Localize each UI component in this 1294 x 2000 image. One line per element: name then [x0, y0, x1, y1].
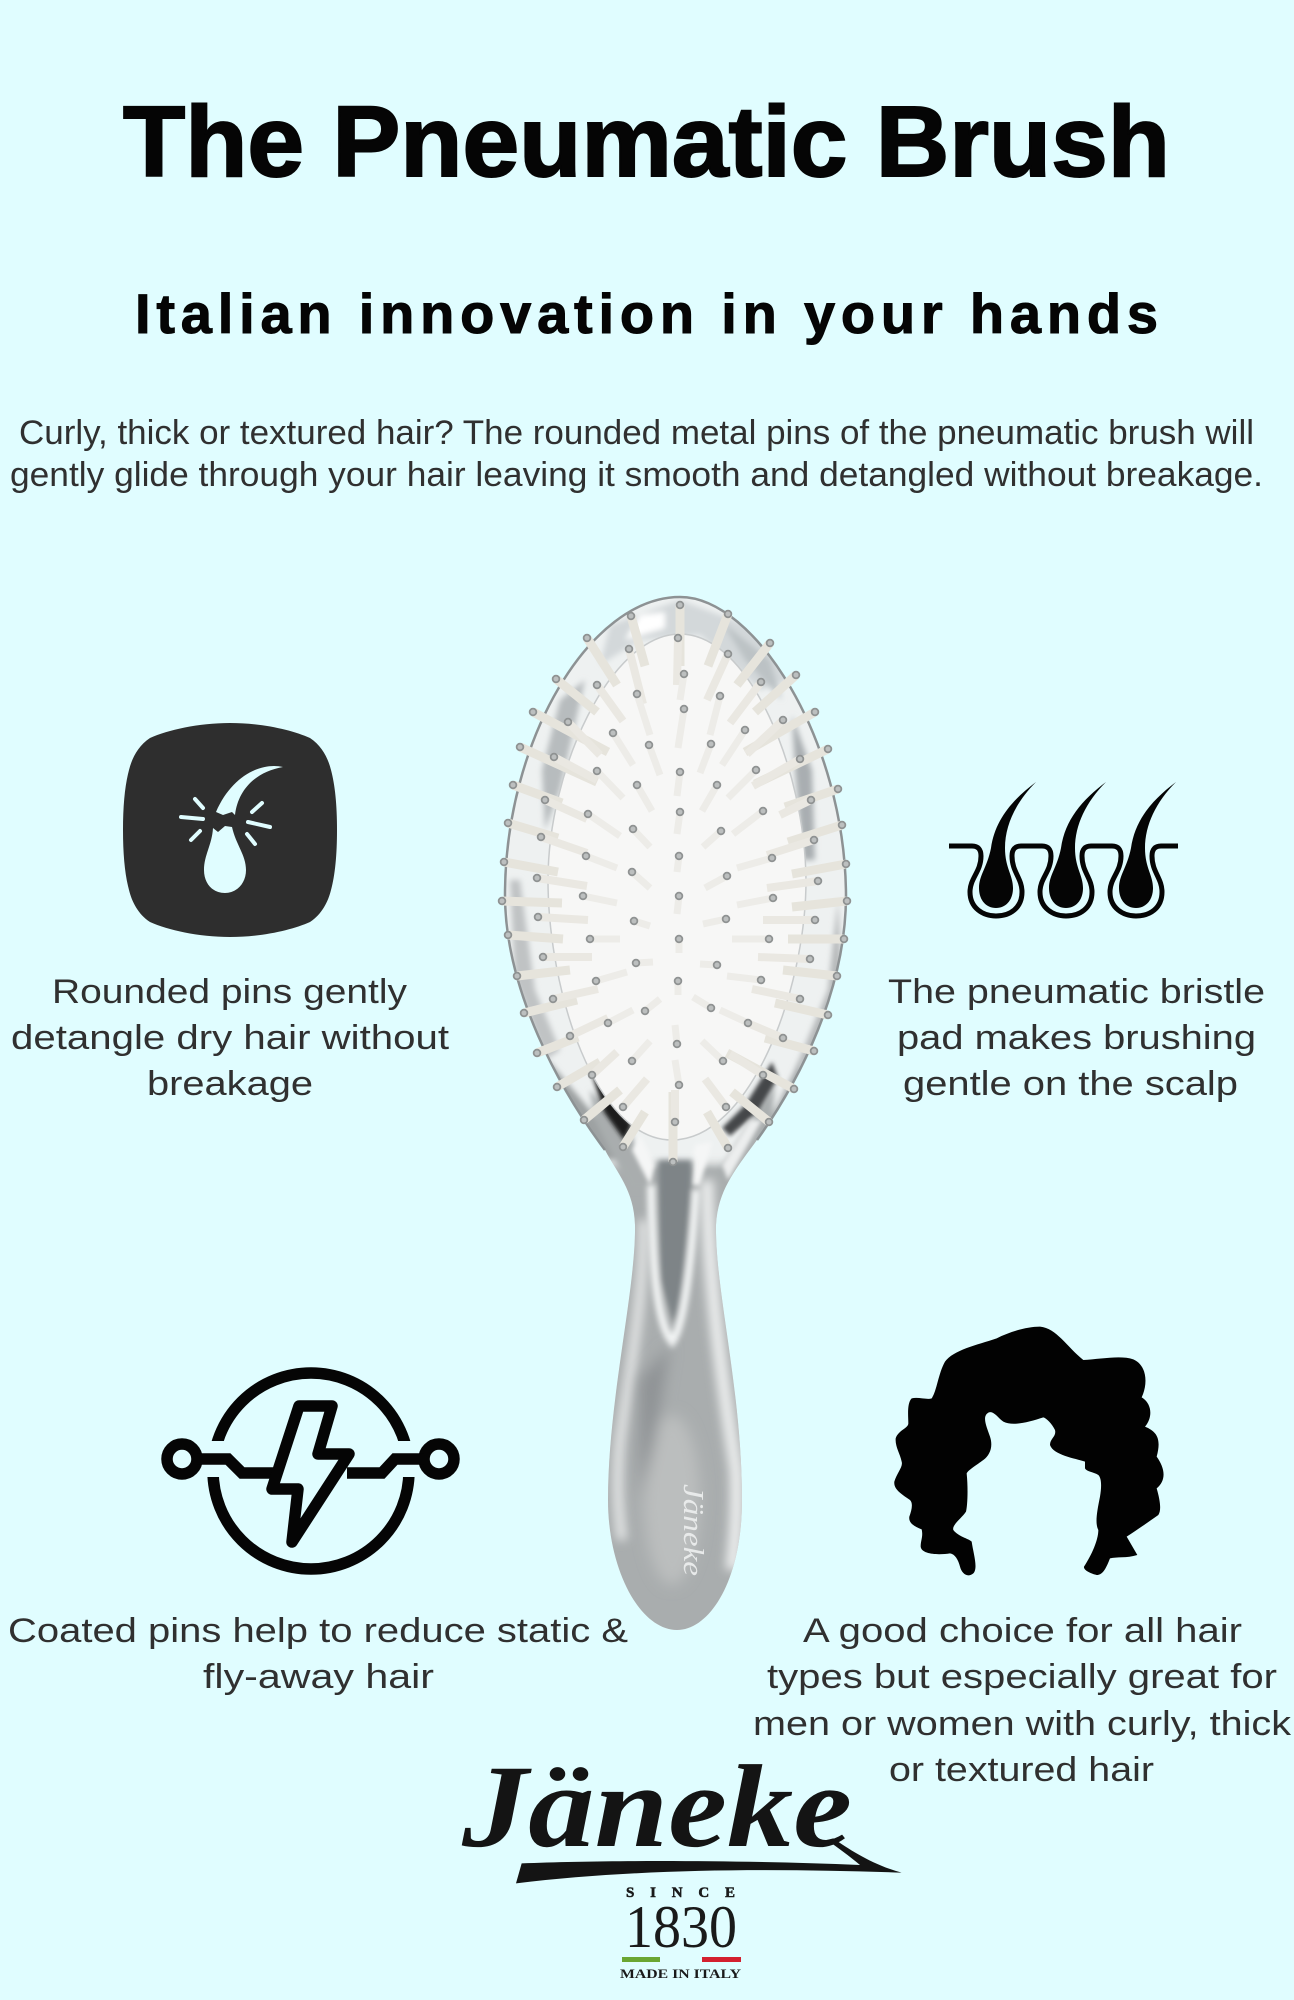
- text: hair types: or textured hair: [889, 1751, 1154, 1789]
- text: rounded pins: breakage: [147, 1065, 313, 1103]
- text: coated pins: fly-away hair: [203, 1658, 434, 1696]
- text: hair types: A good choice for all hair: [803, 1612, 1242, 1650]
- inner pins: [583, 674, 773, 1085]
- brush rim: [505, 597, 846, 1150]
- bristle pad: [548, 634, 806, 1140]
- flag bars: [622, 1957, 660, 1962]
- brush illustration: [490, 590, 860, 1655]
- text: pneumatic pad: pad makes brushing: [897, 1019, 1256, 1057]
- text: coated pins: Coated pins help to reduce static &: [8, 1612, 628, 1650]
- text: rounded pins: [11, 973, 450, 1103]
- logo swoosh: [516, 1838, 902, 1883]
- text: hair types: men or women with curly, thick: [753, 1705, 1292, 1743]
- icon: broken hair: [123, 723, 337, 937]
- icon: hair follicles: [949, 782, 1178, 916]
- logo wordmark: Jäneke: [461, 1741, 852, 1872]
- year: 1830: [625, 1894, 737, 1960]
- since: SINCE: [626, 1885, 735, 1901]
- long outer pins: [502, 605, 847, 1162]
- subtitle: Italian innovation in your hands: [135, 282, 1158, 345]
- intro text: Curly, thick or textured hair? The rounded metal pins of the pneumatic brush will: [19, 414, 1254, 452]
- text: hair types: types but especially great for: [767, 1658, 1277, 1696]
- text: coated pins: [8, 1612, 628, 1696]
- middle pins: [537, 638, 818, 1122]
- intro text: gently glide through your hair leaving it smooth and detangled without breakage.: [10, 456, 1263, 494]
- icon: static electricity: [167, 1373, 454, 1569]
- brush body: [506, 598, 844, 1630]
- icon: curly hair: [894, 1327, 1164, 1575]
- pin balls: [502, 605, 847, 1162]
- text: pneumatic pad: The pneumatic bristle: [888, 973, 1265, 1011]
- logo: Janeke since 1830: [461, 1741, 902, 1981]
- text: pneumatic pad: [888, 973, 1265, 1103]
- title: The Pneumatic Brush: [123, 86, 1170, 198]
- text: pneumatic pad: gentle on the scalp: [903, 1065, 1238, 1103]
- handle logo: Jäneke: [677, 1484, 708, 1576]
- text: rounded pins: detangle dry hair without: [11, 1019, 450, 1057]
- text: rounded pins: Rounded pins gently: [52, 973, 407, 1011]
- intro text: [10, 414, 1263, 494]
- made in italy: MADE IN ITALY: [620, 1967, 741, 1981]
- text: hair types: [753, 1612, 1292, 1789]
